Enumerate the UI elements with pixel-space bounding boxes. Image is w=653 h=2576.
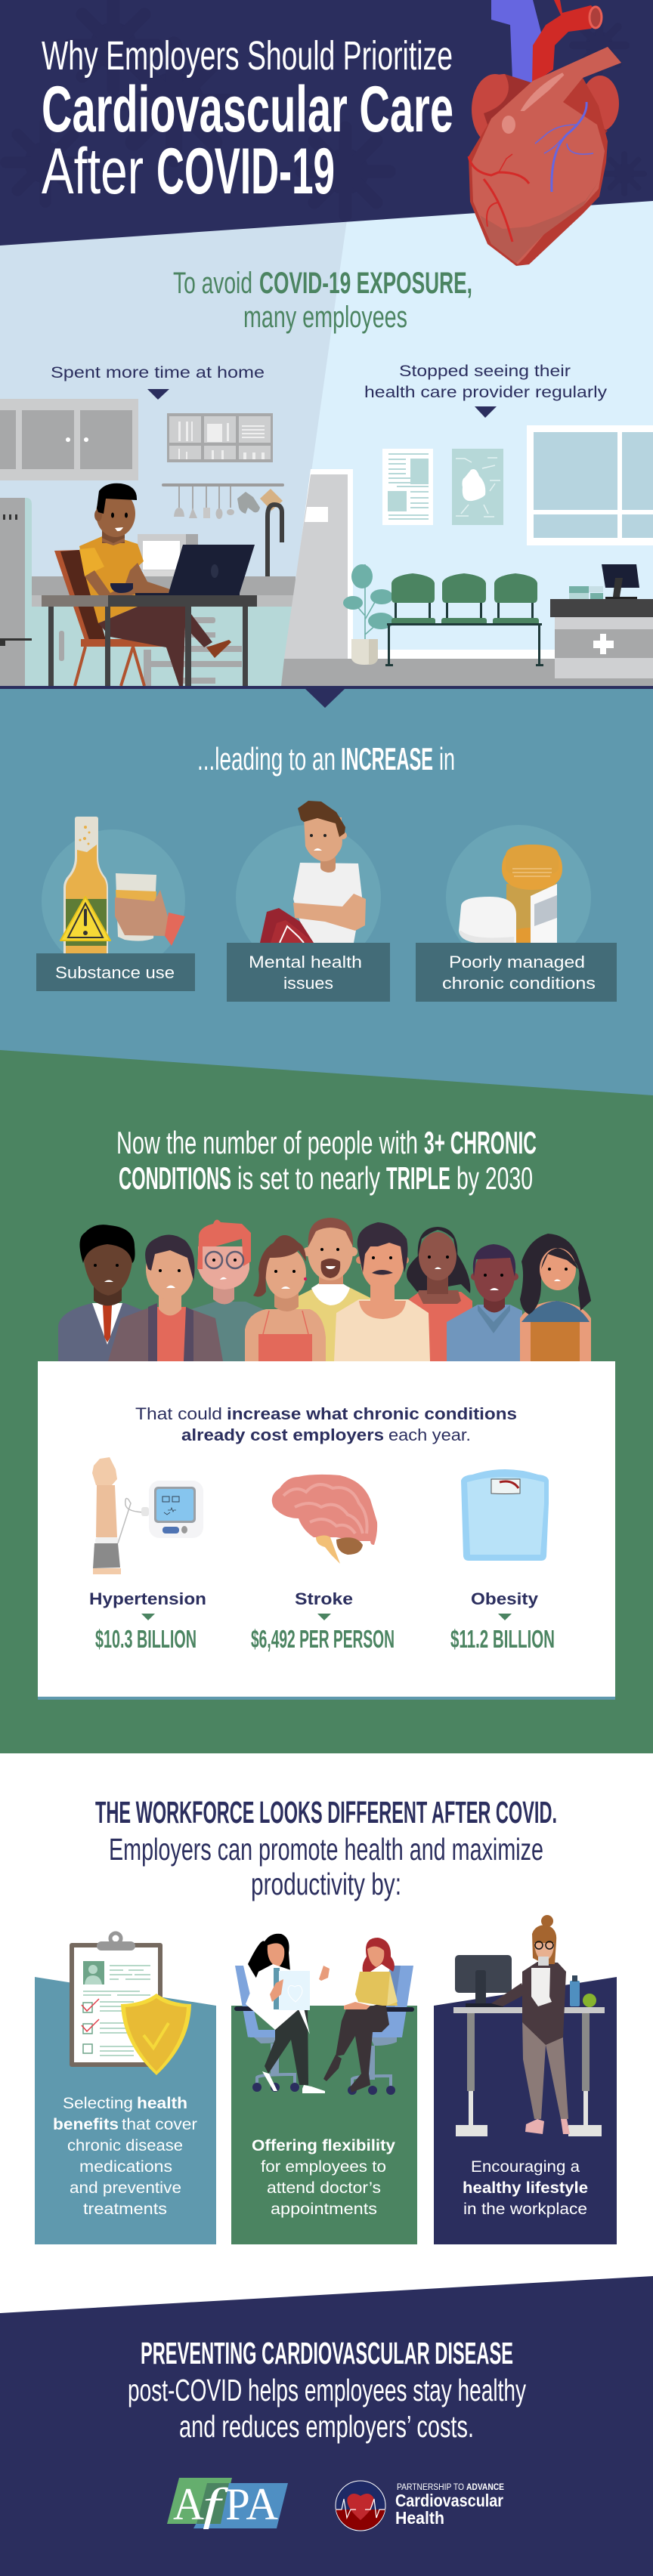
logo: Partnership to Advance Cardiovascular Health: Health (395, 2508, 444, 2528)
panel 2 text: attend doctor’s (267, 2179, 381, 2197)
caption: stopped seeing provider (364, 363, 608, 418)
plant (343, 564, 394, 665)
card intro text: That could (135, 1404, 222, 1423)
panel 1 text: and preventive (70, 2179, 181, 2197)
shelf unit (167, 413, 273, 462)
footer panel (0, 2276, 653, 2576)
caption: spent more time at home (51, 364, 265, 400)
heading: chronic conditions triple: TRIPLE (386, 1160, 450, 1196)
doctor (246, 1934, 330, 2093)
heading: chronic conditions triple: by 2030 (456, 1160, 533, 1196)
reception desk (550, 564, 653, 678)
card intro text: increase what chronic conditions (227, 1404, 517, 1423)
stat: hypertension (89, 1589, 206, 1653)
icon: clipboard with shield (70, 1933, 191, 2075)
illustration: home kitchen (0, 399, 296, 686)
icon: brain (272, 1475, 377, 1564)
item: mental health issues (227, 801, 390, 1002)
icon: hand holding glass (115, 873, 185, 946)
green section (0, 1050, 653, 1753)
logo: AfPA: PA (225, 2479, 278, 2529)
icon: anxious man (260, 801, 366, 943)
fridge (0, 498, 32, 686)
illustration: doctor and patient (234, 1934, 414, 2095)
logo: AfPA (167, 2478, 288, 2529)
heading: avoid exposure (173, 267, 472, 334)
person: woman with wavy hair (245, 1235, 326, 1361)
panel 2 text: for employees to (261, 2158, 386, 2176)
heading: avoid exposure: COVID-19 EXPOSURE, (259, 267, 472, 300)
panel 1 text: benefits (53, 2116, 119, 2133)
title: Why Employers Should Prioritize (42, 33, 453, 79)
floor (281, 659, 653, 686)
microwave (138, 534, 198, 576)
heading: chronic conditions triple: is set to nearly (237, 1160, 380, 1196)
table (42, 595, 257, 686)
title: COVID-19 (156, 135, 335, 208)
poster: anatomy (452, 449, 503, 525)
item: substance use (36, 817, 195, 991)
item: mental health issues: Mental health (249, 953, 362, 971)
panel 1 text: health (137, 2095, 187, 2112)
item: mental health issues: issues (283, 974, 333, 993)
person: woman with long hair and apron (520, 1234, 591, 1361)
panel 1 text: chronic disease (67, 2137, 183, 2154)
counter and lower cabinets (32, 576, 296, 686)
logo: AfPA: f (203, 2479, 229, 2529)
person: man with mustache (334, 1222, 430, 1361)
heading: the workforce looks different: productivity by: (251, 1867, 401, 1901)
heading: chronic conditions triple: Now the number of people with (116, 1125, 418, 1160)
panel 1 text: medications (79, 2158, 172, 2176)
icon: arm with blood pressure monitor (92, 1457, 203, 1574)
waiting chairs (385, 573, 543, 666)
stat: stroke (251, 1589, 395, 1653)
stat: hypertension: Hypertension (89, 1589, 206, 1608)
logo: AfPA: A (173, 2479, 204, 2529)
card intro text: each year. (388, 1425, 471, 1444)
icon: pill bottle (502, 845, 562, 943)
person: bearded man (292, 1218, 370, 1361)
illustration: woman at standing desk (453, 1915, 605, 2136)
panel 3 text (463, 2158, 588, 2218)
heading: leading to an increase: ...leading to an (197, 741, 336, 777)
right chair (348, 1964, 414, 2095)
stat: stroke: Stroke (295, 1589, 353, 1608)
laptop (135, 545, 255, 596)
panel 2 text: Offering flexibility (252, 2137, 395, 2154)
utensil rail (162, 483, 284, 519)
heading: leading to an increase: INCREASE (341, 741, 433, 777)
header panel (0, 0, 653, 246)
title: After (42, 135, 144, 208)
panel 3 text: Encouraging a (471, 2158, 580, 2176)
illustration: clinic waiting room (281, 425, 653, 686)
panel 1 text (53, 2095, 197, 2218)
item: poorly managed chronic conditions: chronic conditions (442, 974, 596, 993)
cabinets (0, 399, 138, 480)
logo: Partnership to Advance Cardiovascular Health: Cardiovascular (395, 2491, 503, 2510)
caption: spent more time at home: Spent more time at home (51, 364, 265, 381)
item: poorly managed chronic conditions (416, 825, 617, 1002)
panel: healthy lifestyle (434, 1915, 617, 2244)
door (284, 469, 353, 659)
panel 2 text: appointments (271, 2201, 377, 2218)
panel 3 text: in the workplace (463, 2201, 587, 2218)
icon: weight scale (461, 1469, 549, 1561)
poster: article (382, 449, 433, 525)
heading: avoid exposure: To avoid (173, 267, 252, 300)
card intro text (135, 1404, 517, 1444)
logo: Partnership to Advance Cardiovascular Health: ADVANCE (466, 2483, 504, 2492)
icon: white pills (459, 897, 516, 943)
caption: stopped seeing provider: health care provider regularly (364, 384, 608, 401)
white card (38, 1361, 615, 1700)
stat: hypertension: $10.3 BILLION (95, 1625, 197, 1653)
panel: offering flexibility (231, 1934, 417, 2244)
footer text: and reduces employers’ costs. (179, 2409, 474, 2444)
chair (54, 550, 169, 686)
stat: obesity: $11.2 BILLION (450, 1625, 555, 1653)
title (42, 33, 453, 208)
stat: obesity (450, 1589, 555, 1653)
background: light room (0, 196, 653, 687)
item: substance use: Substance use (55, 963, 175, 982)
panel 1 text: Selecting (63, 2095, 133, 2112)
teal section (0, 686, 653, 1103)
person: woman in coral dress (407, 1227, 472, 1361)
heading: chronic conditions triple: CONDITIONS (119, 1160, 231, 1196)
person: man in jacket (108, 1234, 223, 1361)
icon: anatomical heart (469, 0, 621, 266)
stat: obesity: Obesity (471, 1589, 539, 1608)
caption: stopped seeing provider: Stopped seeing their (399, 363, 571, 380)
panel 1 text: that cover (122, 2116, 197, 2133)
heading: leading to an increase: in (439, 741, 455, 777)
panel 3 text: healthy lifestyle (463, 2179, 588, 2197)
footer text (128, 2336, 526, 2444)
heading: the workforce looks different (95, 1795, 557, 1901)
icon: beer bottle (60, 817, 110, 953)
panel 2 text (252, 2137, 395, 2218)
logo: Partnership to Advance Cardiovascular Health: PARTNERSHIP TO (397, 2483, 464, 2492)
heading: chronic conditions triple (116, 1125, 537, 1196)
person: man in suit (58, 1225, 144, 1361)
left chair (234, 1966, 299, 2092)
person: man in blue shirt (447, 1244, 522, 1361)
faucet (268, 505, 282, 576)
card intro text: already cost employers (181, 1425, 384, 1444)
stat: stroke: $6,492 PER PERSON (251, 1625, 395, 1653)
panel 1 text: treatments (83, 2201, 167, 2218)
patient (323, 1938, 398, 2093)
illustration: group of nine people (58, 1218, 591, 1361)
person at laptop (79, 483, 231, 686)
panel: health benefits (35, 1933, 216, 2244)
item: poorly managed chronic conditions: Poorly managed (449, 953, 585, 971)
heading: avoid exposure: many employees (243, 301, 407, 334)
window (527, 425, 653, 545)
heading: chronic conditions triple: 3+ CHRONIC (424, 1125, 537, 1160)
person: red hair glasses (191, 1219, 267, 1361)
logo: Partnership to Advance Cardiovascular Health (336, 2481, 504, 2531)
